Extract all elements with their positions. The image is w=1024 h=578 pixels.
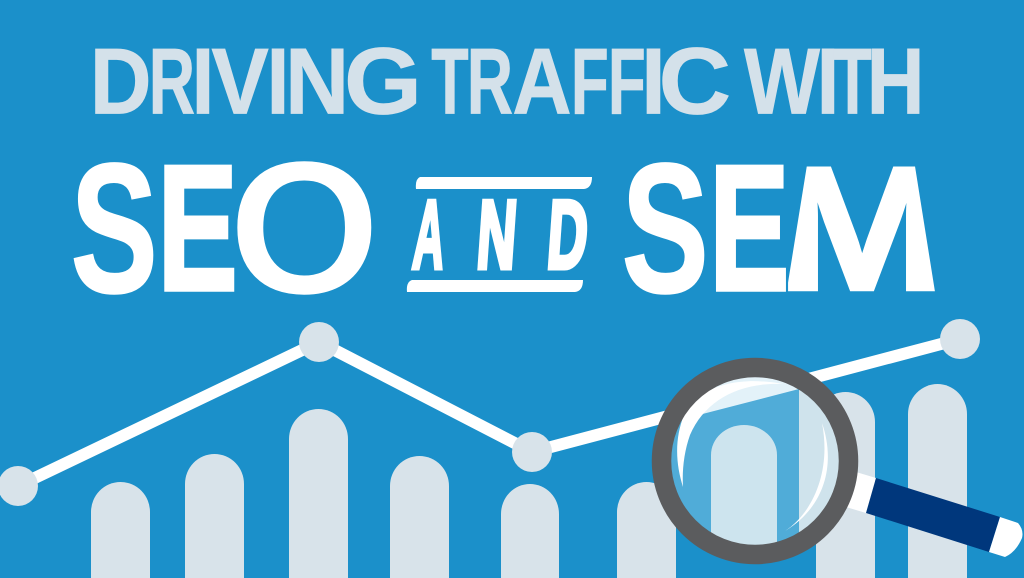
title: driving traffic with: I <box>817 30 839 134</box>
and: bottom rule <box>407 280 583 292</box>
title: driving traffic with: H <box>867 30 924 134</box>
title: driving traffic with: D <box>90 30 152 134</box>
title: driving traffic with: R <box>149 30 195 134</box>
title: driving traffic with: T <box>431 30 469 134</box>
title: driving traffic with: A <box>512 30 572 134</box>
title: driving traffic with: I <box>192 30 214 134</box>
title: driving traffic with: T <box>833 30 872 134</box>
and: top rule <box>416 177 592 189</box>
trend line <box>18 339 960 486</box>
title: driving traffic with: C <box>659 29 731 135</box>
title: SEM: M <box>776 130 948 328</box>
title: SEM: E <box>709 128 789 328</box>
title: driving traffic with: N <box>285 30 349 134</box>
title: SEO: E <box>158 128 238 328</box>
magnifier lens <box>671 377 838 545</box>
title: SEO: S <box>71 126 158 332</box>
title: SEM <box>622 126 948 332</box>
and: letters: A <box>410 180 449 289</box>
magnifier handle <box>846 472 1022 557</box>
title: driving traffic with: W <box>744 30 820 134</box>
title: driving traffic with: V <box>211 30 269 134</box>
and: letters: D <box>544 180 592 289</box>
title: driving traffic with: F <box>571 30 609 134</box>
magnifier ring <box>662 368 848 554</box>
and: letters: N <box>474 180 520 289</box>
title: driving traffic with: I <box>641 30 666 134</box>
title: driving traffic with: F <box>608 30 646 134</box>
bar chart <box>91 384 967 578</box>
icon: magnifying glass <box>660 368 1022 578</box>
title: SEM: S <box>622 126 709 332</box>
title: driving traffic with: I <box>267 30 289 134</box>
title: driving traffic with: R <box>467 30 513 134</box>
and lockup <box>407 177 592 292</box>
title: SEO: O <box>228 120 381 335</box>
trend line data points <box>0 319 980 506</box>
title: driving traffic with: G <box>344 29 422 135</box>
